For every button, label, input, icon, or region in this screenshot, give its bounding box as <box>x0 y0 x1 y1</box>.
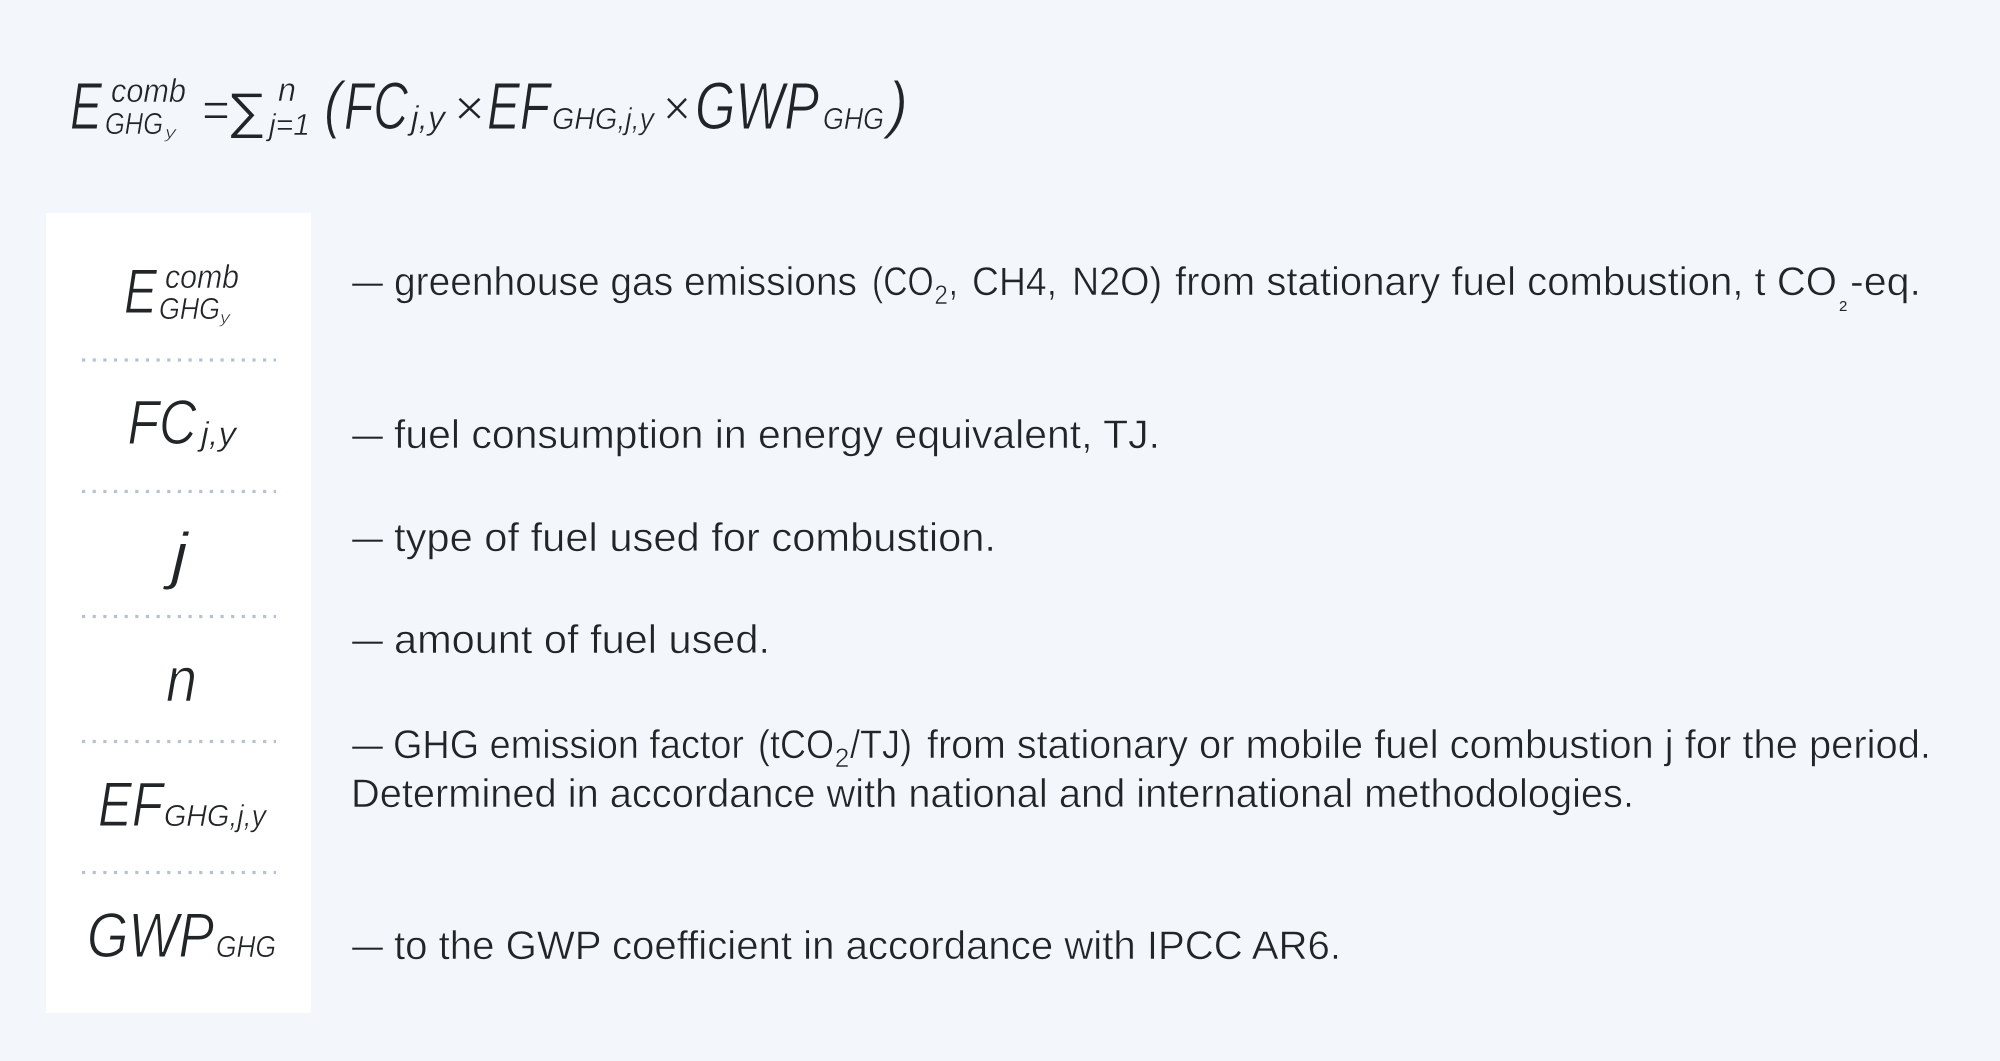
main formula: ∑ <box>230 83 264 141</box>
main formula: ( <box>324 70 347 140</box>
main formula: EF <box>487 69 553 144</box>
symbol: E comb GHG y: GHG <box>159 291 220 326</box>
description: emission factor: Determined in accordance with national and international methodologies. <box>351 772 1634 816</box>
symbol: E comb GHG y: comb <box>165 258 239 295</box>
symbol: E comb GHG y <box>124 257 239 327</box>
symbol: j: j <box>161 521 190 591</box>
symbol: FC j,y: j,y <box>197 415 239 452</box>
symbol: EF GHG,j,y: EF <box>98 770 166 840</box>
description: emissions: ₂ <box>934 258 949 310</box>
description: emission factor: — <box>352 723 383 767</box>
description: emissions: — <box>352 260 383 304</box>
description: fuel amount: amount of fuel used. <box>394 618 770 662</box>
description: emissions <box>352 258 1921 315</box>
main formula: j=1 <box>265 107 310 142</box>
main formula: × <box>454 80 485 136</box>
description: fuel consumption: — <box>352 413 383 457</box>
description: emission factor: (tCO <box>758 723 842 767</box>
symbol: E comb GHG y: y <box>219 308 232 327</box>
symbol: GWP GHG: GWP <box>87 901 214 971</box>
symbol: EF GHG,j,y <box>98 770 268 840</box>
panel: symbols column <box>46 213 311 1013</box>
description: GWP coefficient: to the GWP coefficient in accordance with IPCC AR6. <box>394 924 1341 968</box>
main formula: j,y <box>407 99 448 136</box>
description: emissions: -eq. <box>1850 260 1921 304</box>
description: emissions: greenhouse gas emissions <box>394 260 857 304</box>
main formula: ) <box>881 70 908 140</box>
description: emission factor: /TJ) <box>850 723 912 767</box>
description: emissions: from stationary fuel combustion, t CO <box>1175 260 1837 304</box>
symbol: E comb GHG y: E <box>124 257 158 327</box>
main formula: GWP <box>695 69 819 144</box>
main formula: n <box>278 71 296 108</box>
main formula: E <box>70 69 103 144</box>
main formula: × <box>663 80 691 136</box>
description: emission factor: GHG emission factor <box>393 723 744 767</box>
main formula: FC <box>344 69 408 144</box>
description: emission factor <box>351 721 1931 816</box>
description: emissions: N2O) <box>1072 260 1162 304</box>
description: fuel type: type of fuel used for combustion. <box>394 516 996 560</box>
main formula: GHG <box>105 106 163 141</box>
main formula: GHG,j,y <box>552 101 656 136</box>
description: emissions: 2 <box>1839 298 1847 315</box>
description: emissions: (CO <box>872 260 945 304</box>
main formula: = <box>202 82 230 138</box>
description: fuel type: — <box>352 516 383 560</box>
main formula: y <box>164 123 178 142</box>
symbol: n: n <box>166 645 197 715</box>
description: emissions: , <box>949 260 958 304</box>
symbol: GWP GHG: GHG <box>216 929 276 964</box>
description: fuel consumption: fuel consumption in energy equivalent, TJ. <box>394 413 1160 457</box>
main formula <box>70 69 908 144</box>
description: emission factor: from stationary <box>927 723 1188 767</box>
description: emission factor: or mobile fuel combustion j for the period. <box>1199 723 1931 767</box>
description: fuel amount: — <box>352 618 383 662</box>
main formula: GHG <box>823 101 884 136</box>
symbol: FC j,y: FC <box>128 388 197 458</box>
description: emissions: CH4, <box>972 260 1057 304</box>
main formula: comb <box>111 72 186 109</box>
description: GWP coefficient: — <box>352 924 383 968</box>
symbol: EF GHG,j,y: GHG,j,y <box>164 798 268 833</box>
description: emission factor: ₂ <box>834 721 850 773</box>
